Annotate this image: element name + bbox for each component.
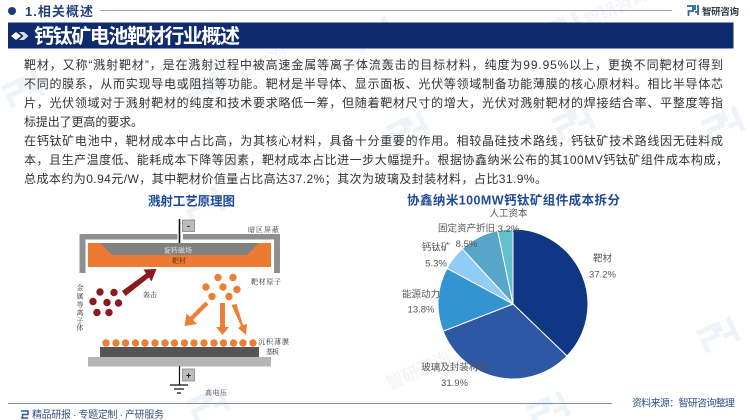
brand logo xyxy=(687,5,739,18)
text: 智研咨询 xyxy=(221,44,291,91)
intro text block xyxy=(24,57,728,186)
diagram labels: 基板 xyxy=(266,347,279,356)
section heading: 1.相关概述 xyxy=(25,4,93,19)
pie labels: 固定资产折旧 xyxy=(438,222,495,234)
intro text block: 本，且生产温度低、能耗成本下降等因素，靶材成本占比进一步大幅提升。根据协鑫纳米公布的其100MV钙钛矿组件成本构成， xyxy=(24,152,728,167)
diagram labels: 靶材原子 xyxy=(251,277,281,286)
diagram labels: 金 xyxy=(76,283,84,292)
pie labels: 玻璃及封装材料 xyxy=(421,362,488,374)
diagram labels: 属 xyxy=(76,292,84,300)
diagram labels: 暗区屏蔽 xyxy=(248,225,279,234)
diagram labels xyxy=(76,225,289,397)
pie chart xyxy=(438,229,588,379)
target: 旋转磁场 xyxy=(164,246,192,254)
title banner: 钙钛矿电池靶材行业概述 xyxy=(34,25,240,48)
diagram labels: 子 xyxy=(76,317,84,325)
intro text block: 不同的膜系，从而实现导电或阻挡等功能。靶材是半导体、显示面板、光伏等领域制备功能薄膜的核心原材料。相比半导体芯 xyxy=(24,76,723,91)
section heading xyxy=(8,4,672,19)
diagram labels: 轰击 xyxy=(143,290,157,299)
ground xyxy=(170,366,194,393)
intro text block: 靶材，又称“溅射靶材”，是在溅射过程中被高速金属等离子体流轰击的目标材料，纯度为99.95%以上，更换不同靶材可得到 xyxy=(24,57,723,72)
substrate xyxy=(100,347,259,357)
pie labels: 3.2% xyxy=(498,224,520,235)
plasma ions xyxy=(89,288,122,316)
brand logo: 智研咨询 xyxy=(702,6,739,18)
pie labels: 钙钛矿 xyxy=(422,242,451,254)
bombard arrow xyxy=(122,269,156,296)
target atoms xyxy=(202,274,241,300)
diagram title: 溅射工艺原理图 xyxy=(148,194,235,208)
cathode xyxy=(180,219,194,243)
pie chart title: 协鑫纳米100MW钙钛矿组件成本拆分 xyxy=(407,192,620,208)
ground: + xyxy=(186,370,191,380)
pie labels: 人工资本 xyxy=(489,208,528,220)
base plate xyxy=(88,357,271,366)
source note: 资料来源：智研咨询整理 xyxy=(632,396,735,410)
pie labels: 5.3% xyxy=(425,258,447,270)
text: 智研咨询 xyxy=(383,347,453,394)
diagram labels: 高电压 xyxy=(205,388,227,397)
intro text block: 在钙钛矿电池中，靶材成本中占比高，为其核心材料，具备十分重要的作用。相较晶硅技术路线，钙钛矿技术路线因无硅料成 xyxy=(24,133,723,148)
target xyxy=(88,243,271,267)
pie labels: 靶材 xyxy=(593,252,612,264)
sputtering diagram xyxy=(76,219,289,397)
deposited film atoms xyxy=(102,339,257,347)
pie labels: 37.2% xyxy=(589,270,617,280)
pie labels xyxy=(402,208,617,389)
cathode: - xyxy=(187,221,190,231)
intro text block: 总成本约为0.94元/W，其中靶材价值量占比高达37.2%；其次为玻璃及封装材料，占比31.9%。 xyxy=(24,171,547,186)
pie labels: 8.5% xyxy=(456,239,478,250)
pie labels: 能源动力 xyxy=(402,288,440,300)
diagram labels: 体 xyxy=(76,323,84,332)
title banner xyxy=(8,22,734,48)
target: 靶材 xyxy=(172,256,186,265)
diagram labels: 离 xyxy=(76,308,84,317)
atom arrows xyxy=(184,302,247,335)
footer rule xyxy=(8,402,612,404)
pie labels: 31.9% xyxy=(441,378,469,389)
diagram labels: 等 xyxy=(76,300,84,309)
text: 智研咨询 xyxy=(518,274,588,321)
dark space shield xyxy=(80,234,280,273)
intro text block: 标提出了更高的要求。 xyxy=(24,114,143,129)
pie labels: 13.8% xyxy=(408,304,435,316)
diagram labels: 沉积薄膜 xyxy=(258,337,289,346)
intro text block: 片，光伏领域对于溅射靶材的纯度和技术要求略低一筹，但随着靶材尺寸的增大，光伏对溅射靶材的焊接结合率、平整度等指 xyxy=(24,95,723,110)
